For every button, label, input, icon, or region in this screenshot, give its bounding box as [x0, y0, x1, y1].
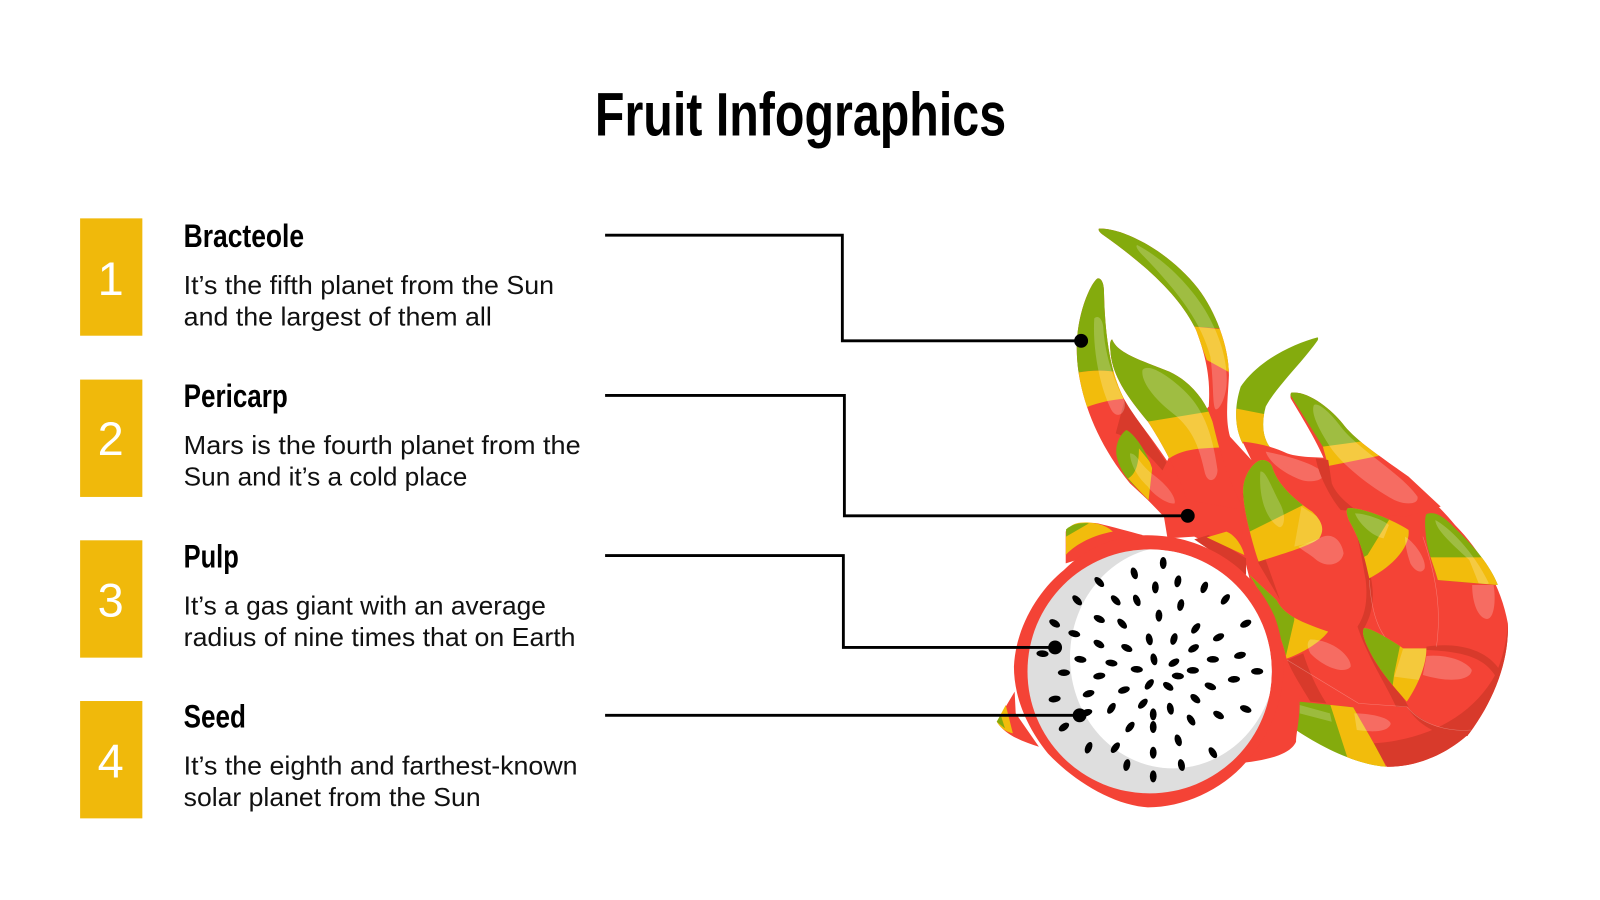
seeds [1036, 557, 1263, 782]
item 4: Seed [80, 698, 578, 818]
heading: Pericarp: Pericarp [184, 377, 288, 414]
description 2: Mars is the fourth planet from the [184, 432, 581, 460]
top fold [1194, 535, 1246, 575]
number box 1: 1 [98, 253, 124, 305]
top-left bract tip [1066, 523, 1089, 537]
fruit body silhouette [1241, 455, 1508, 767]
number box 4: 4 [98, 736, 124, 788]
description 4: solar planet from the Sun [184, 784, 481, 812]
bract: middle wide [1110, 340, 1220, 480]
bract: behind half [1250, 575, 1328, 658]
number box 4 [80, 701, 142, 818]
heading: Seed: Seed [184, 698, 246, 735]
leader line 4: Seed [605, 708, 1087, 722]
bract: upper right [1425, 513, 1498, 585]
top-left bract on half [1066, 523, 1144, 563]
rind [1014, 535, 1284, 807]
number box 2 [80, 380, 142, 497]
flesh shadow [1028, 549, 1272, 793]
item 2: Pericarp [80, 377, 581, 497]
description 3 [184, 592, 576, 652]
right lobe behind bracts [1242, 442, 1359, 557]
description 3: radius of nine times that on Earth [184, 624, 576, 652]
description 4 [184, 752, 578, 812]
bract: right upper [1290, 392, 1440, 508]
bract: upper middle [1346, 508, 1409, 578]
description 4: It’s the eighth and farthest-known [184, 752, 578, 780]
item 1: Bracteole [80, 217, 554, 336]
number box 2: 2 [98, 413, 124, 465]
description 2: Sun and it’s a cold place [184, 464, 467, 492]
body shading [1242, 493, 1508, 767]
bract highlight: small left [1130, 453, 1175, 504]
bract: right thin curved [1236, 338, 1318, 447]
whole fruit: bracts and neck [1069, 227, 1508, 767]
description 3: It’s a gas giant with an average [184, 592, 546, 620]
bract: left long [1076, 278, 1167, 503]
bract: small left [1116, 430, 1152, 500]
top-left bract band [1066, 522, 1113, 555]
fine lobe outlines [1287, 537, 1471, 730]
leader line 2: Pericarp [605, 395, 1195, 523]
flesh [1070, 546, 1276, 768]
front bract highlight [1299, 536, 1344, 564]
leader line 3: Pulp [605, 556, 1062, 654]
description 1 [184, 272, 554, 332]
number box 3: 3 [98, 574, 124, 626]
leader line 1: Bracteole [605, 235, 1088, 348]
dark fold beside neck [1316, 458, 1359, 512]
right lump on half [1212, 633, 1300, 767]
dragon fruit illustration [997, 227, 1508, 807]
bract highlight: behind half [1308, 639, 1351, 670]
neck [1148, 407, 1273, 563]
bract: large front [1243, 460, 1322, 562]
bract highlight: bottom [1354, 713, 1391, 731]
title: Fruit Infographics [595, 81, 1006, 149]
cut half of the fruit [997, 522, 1300, 807]
bract: bottom [1297, 702, 1386, 767]
heading: Pulp: Pulp [184, 537, 239, 574]
heading: Bracteole: Bracteole [184, 217, 304, 254]
small bract near rim [1207, 532, 1244, 555]
item 3: Pulp [80, 537, 576, 658]
description 1: It’s the fifth planet from the Sun [184, 272, 554, 300]
number box 1 [80, 218, 142, 336]
description 2 [184, 432, 581, 492]
lobe highlight [1266, 452, 1324, 481]
description 1: and the largest of them all [184, 304, 492, 332]
bract: top long [1098, 228, 1230, 437]
bract highlight: upper middle [1405, 537, 1425, 571]
bract highlight: lower right [1423, 656, 1472, 680]
number box 3 [80, 540, 142, 658]
left bract on half [997, 692, 1039, 747]
bract highlight: upper right [1472, 585, 1495, 619]
bract: lower right [1363, 628, 1426, 702]
